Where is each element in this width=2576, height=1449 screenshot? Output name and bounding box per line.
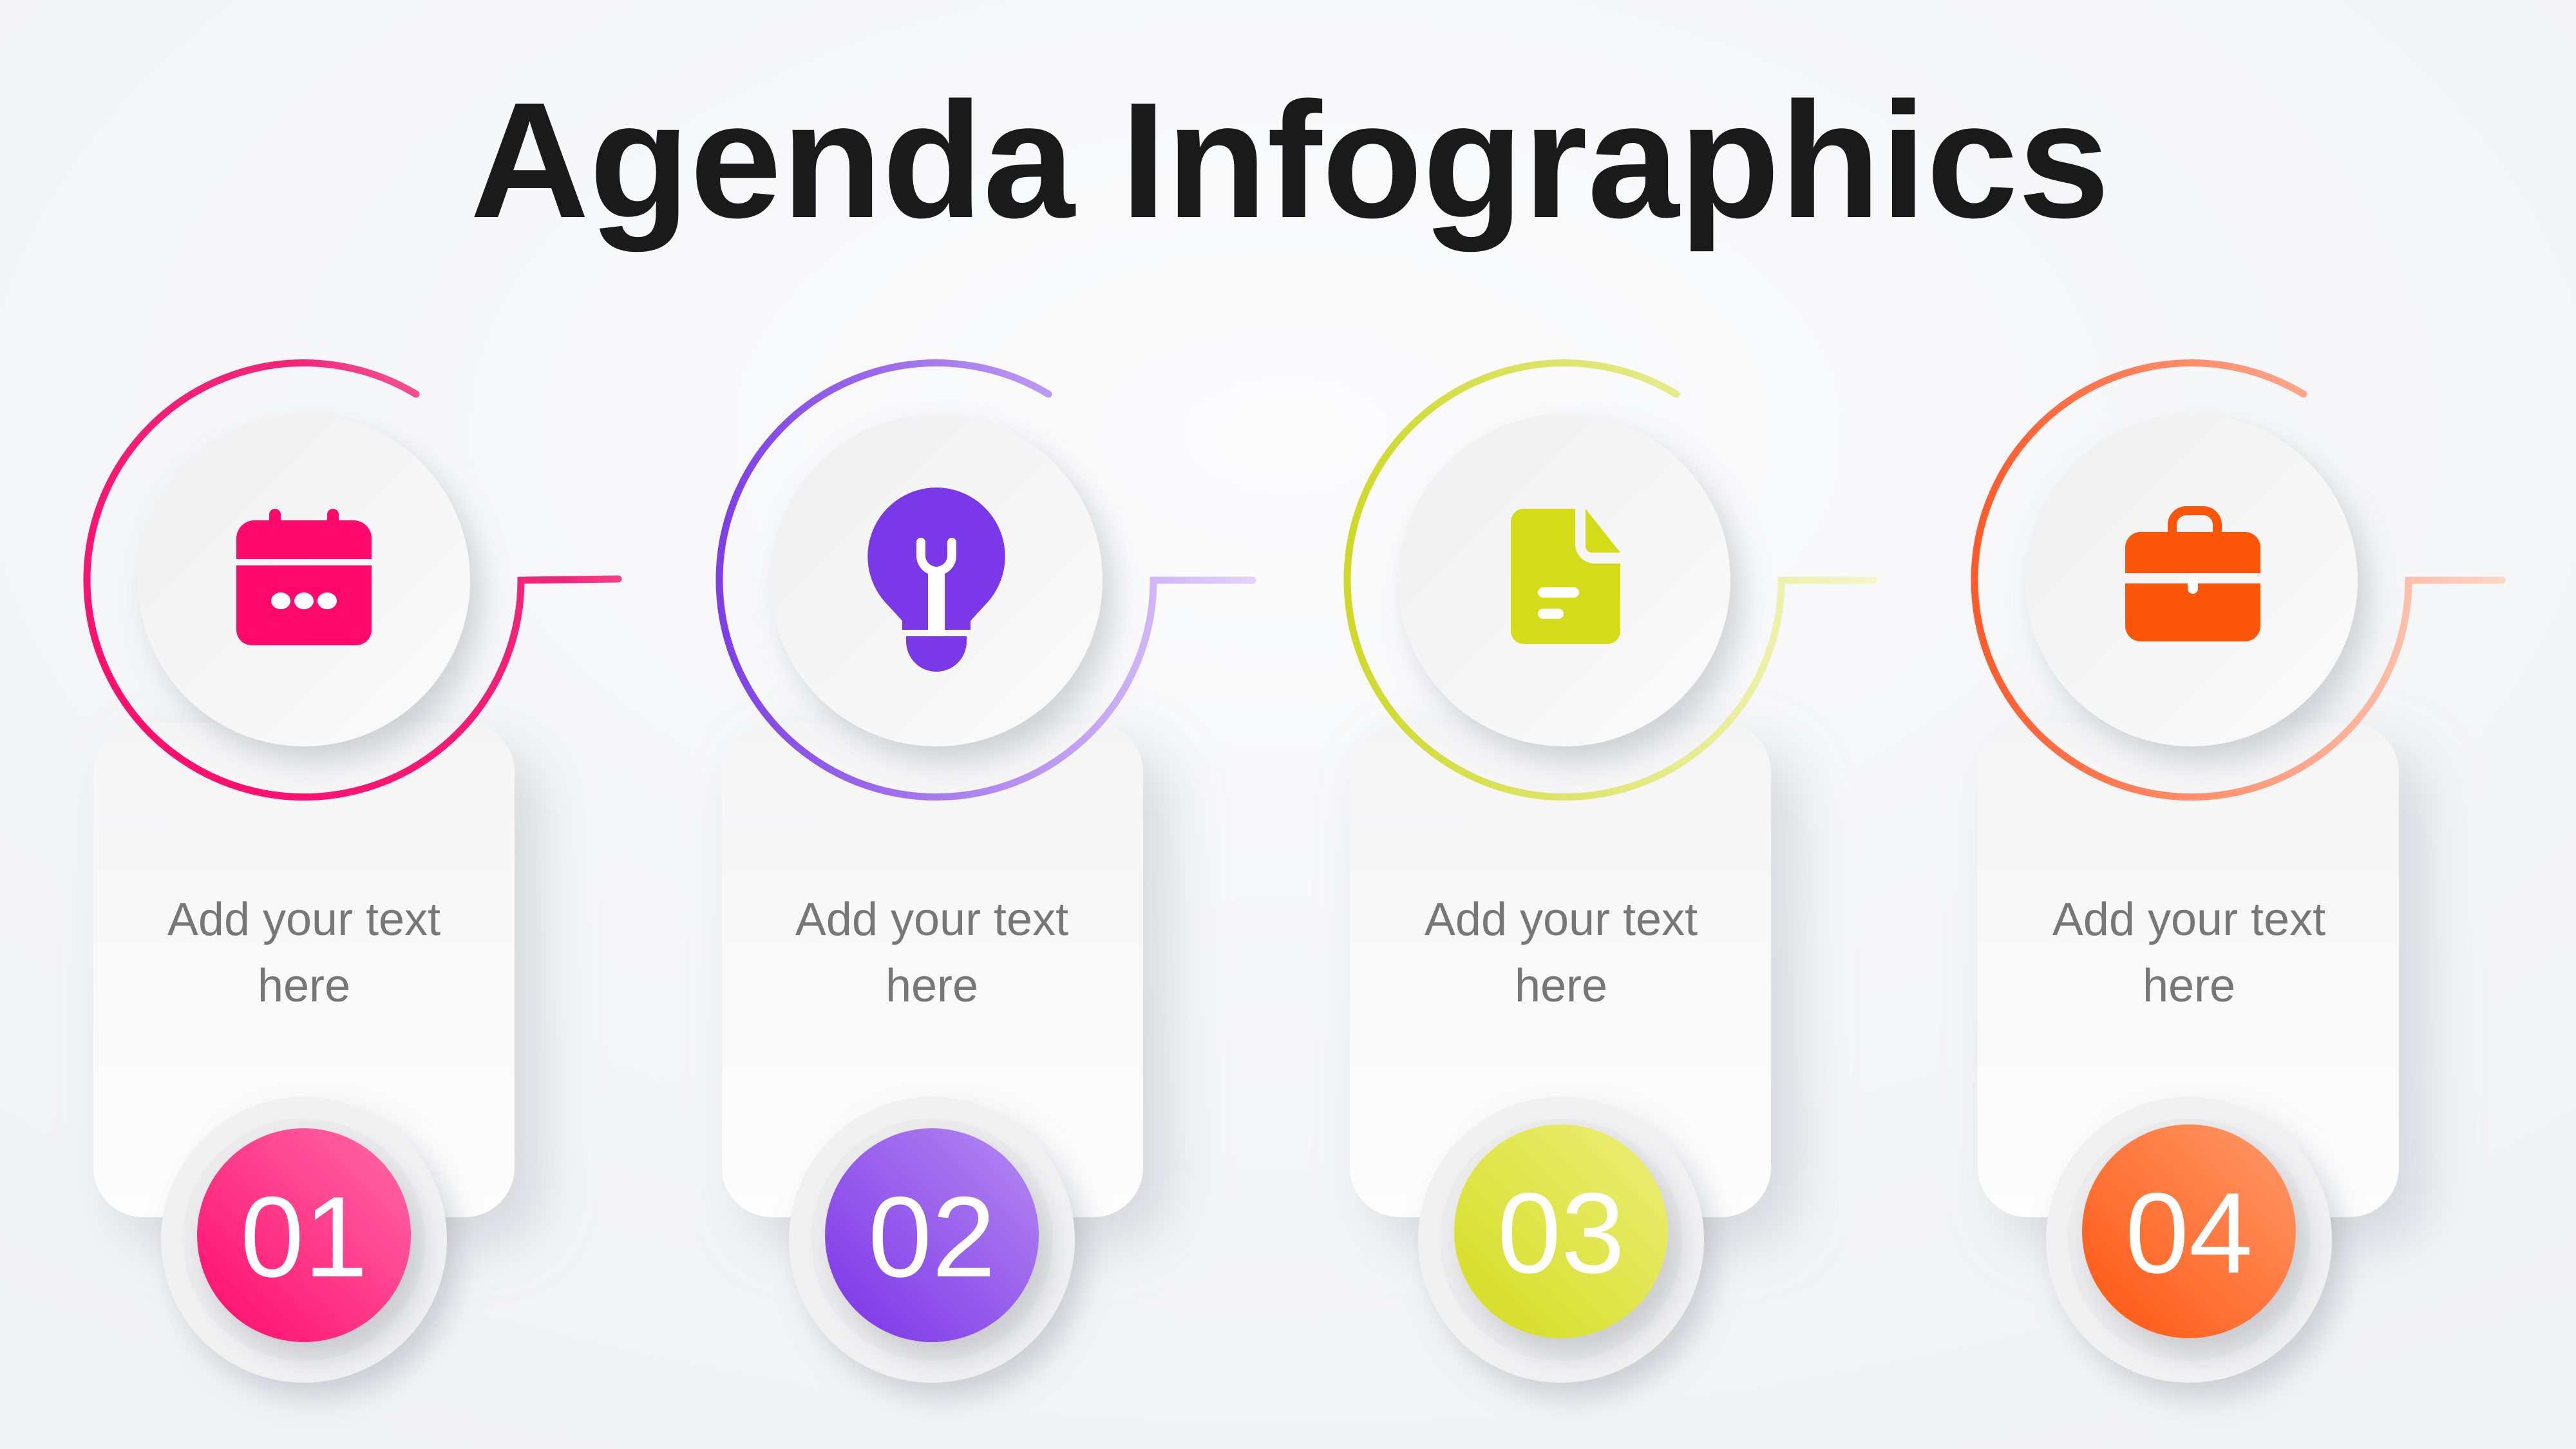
icon: light bulb [867, 488, 1005, 672]
text 02: Add your text [795, 894, 1068, 945]
card 01 [93, 723, 515, 1217]
icon: briefcase [2125, 511, 2260, 641]
number badge 01: 01 [240, 1173, 368, 1301]
card 02 [722, 723, 1143, 1217]
panel: item 03 [1347, 363, 1874, 1383]
text 03: Add your text [1425, 894, 1698, 945]
card 04 [1978, 723, 2399, 1217]
number badge 04 [2046, 1097, 2332, 1383]
text 01: here [258, 960, 350, 1012]
inner circle 02 [770, 414, 1103, 746]
text 02: here [886, 960, 978, 1012]
panel: item 04 [1975, 363, 2502, 1383]
icon: document [1511, 509, 1620, 644]
inner circle 03 [1398, 414, 1730, 746]
ring 01 [87, 363, 618, 797]
inner circle 04 [2025, 414, 2358, 746]
number badge 02 [789, 1097, 1075, 1383]
panel: item 02 [719, 363, 1253, 1383]
icon: calendar [236, 509, 372, 645]
number badge 04: 04 [2125, 1169, 2253, 1297]
number badge 01 [161, 1097, 447, 1383]
number badge 03 [1418, 1097, 1704, 1383]
panel: item 01 [87, 363, 618, 1383]
inner circle 01 [138, 414, 470, 746]
text 01: Add your text [167, 894, 440, 945]
ring 02 [719, 363, 1253, 797]
text 04: here [2143, 960, 2235, 1012]
card 03 [1350, 723, 1771, 1217]
ring 03 [1347, 363, 1874, 797]
ring 04 [1975, 363, 2502, 797]
number badge 03: 03 [1497, 1169, 1625, 1297]
text 04: Add your text [2052, 894, 2325, 945]
title: Agenda Infographics [470, 68, 2110, 252]
text 03: here [1515, 960, 1607, 1012]
number badge 02: 02 [868, 1173, 996, 1301]
